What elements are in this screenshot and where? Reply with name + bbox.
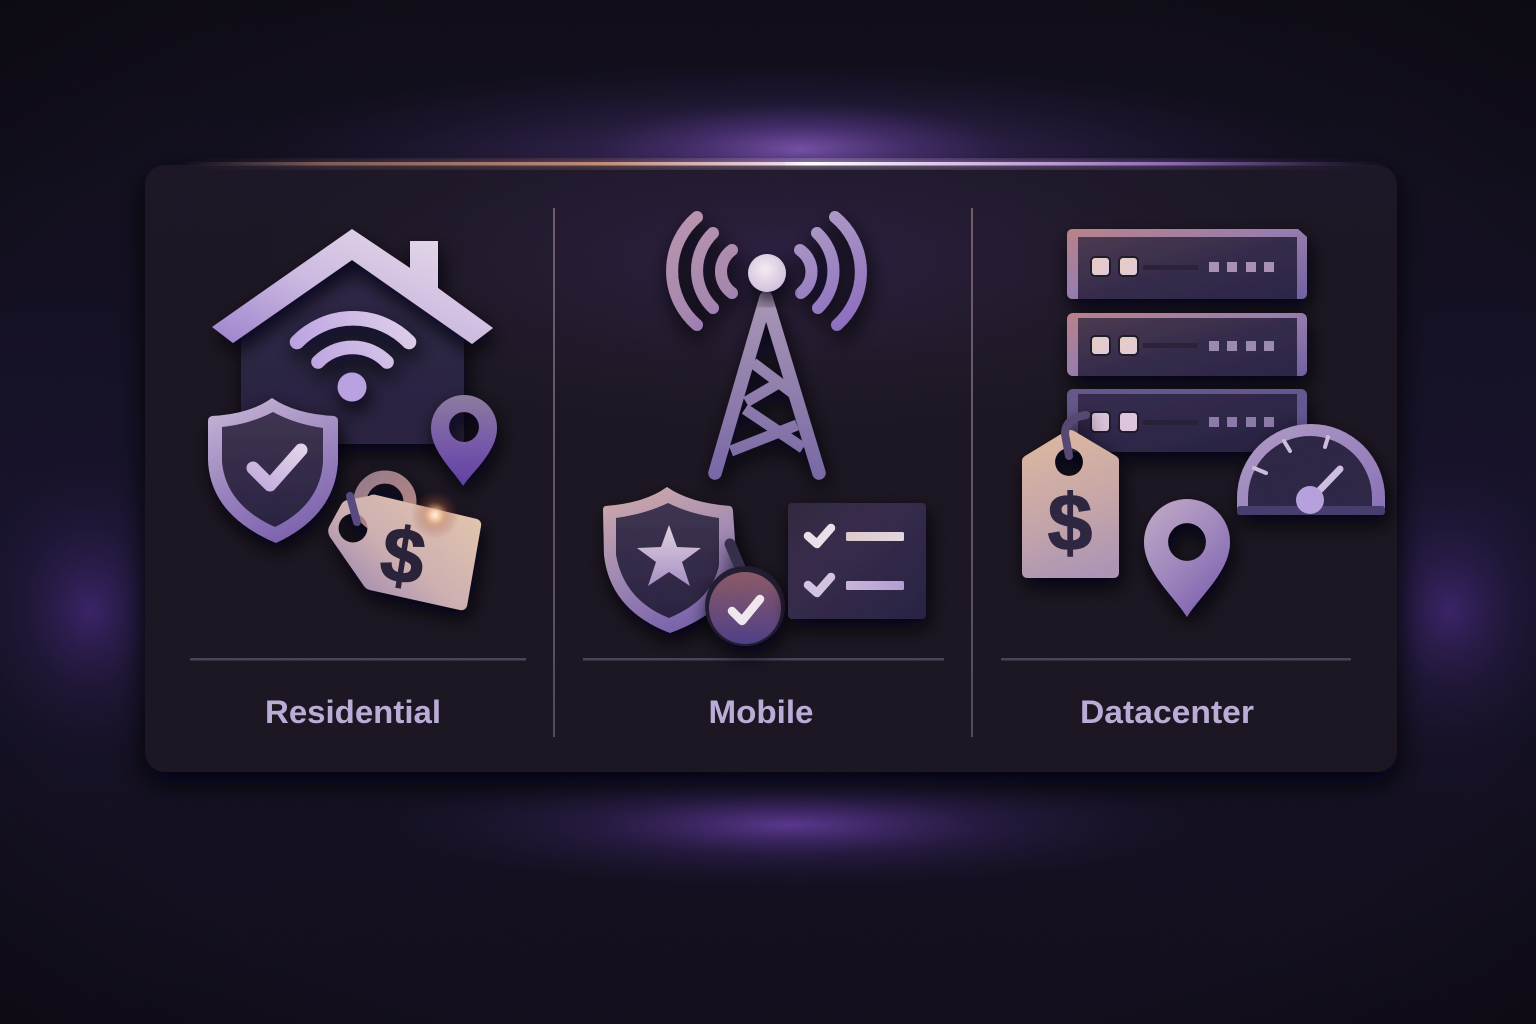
column dividers bbox=[553, 208, 973, 737]
label: Mobile: Mobile bbox=[708, 694, 814, 730]
icon: server unit 3 bbox=[1067, 389, 1307, 452]
icon: location pin bbox=[431, 395, 497, 486]
icon: server unit 2 bbox=[1067, 313, 1307, 376]
icon: tower lattice bbox=[715, 298, 819, 473]
icon: wifi signal bbox=[297, 318, 409, 402]
icon: server unit 1 bbox=[1067, 229, 1307, 299]
icon: shield with check bbox=[208, 398, 338, 543]
top glowing line bbox=[180, 159, 1390, 169]
icon: price tag bbox=[328, 477, 481, 610]
icon: check badge bbox=[705, 544, 785, 646]
icon: price tag bbox=[1022, 415, 1119, 578]
label: Datacenter: Datacenter bbox=[1080, 694, 1254, 730]
icon: speed gauge bbox=[1237, 424, 1385, 515]
icon: price tag: $ bbox=[375, 510, 431, 602]
label rules bbox=[190, 658, 1351, 660]
label: Residential: Residential bbox=[265, 694, 441, 730]
icon: house roof with chimney bbox=[212, 229, 493, 344]
icon: house body bbox=[241, 258, 464, 444]
icon: shield with star bbox=[603, 487, 737, 633]
column: datacenter icons bbox=[1022, 229, 1385, 617]
column: mobile icons bbox=[603, 217, 926, 646]
icon: tower ball bbox=[748, 254, 786, 292]
panel: main card bbox=[145, 90, 1397, 772]
icon: price tag: $ bbox=[1048, 478, 1092, 567]
icon: checklist card bbox=[788, 503, 926, 619]
column: residential icons bbox=[208, 229, 497, 610]
sparkle on tag bbox=[411, 491, 459, 539]
icon: location pin bbox=[1144, 499, 1230, 617]
icon: radio waves bbox=[672, 217, 861, 325]
